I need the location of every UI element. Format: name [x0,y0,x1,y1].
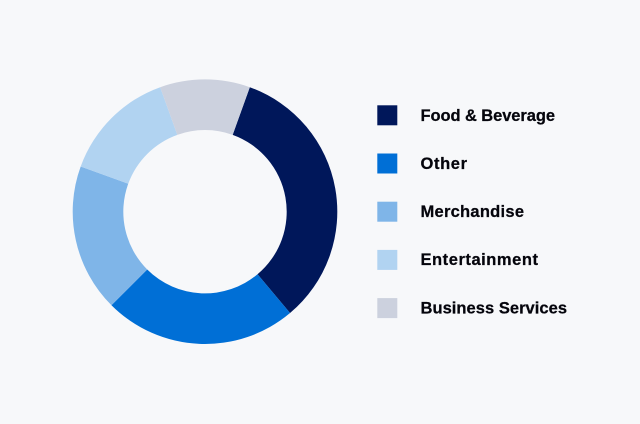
legend item: Business Services: Business Services [420,300,567,318]
legend item: Food & Beverage: Food & Beverage [420,107,555,125]
legend item: Other [377,154,468,174]
legend item: Entertainment: Entertainment [420,251,538,269]
segment: Food & Beverage [233,87,337,313]
segment: Merchandise [73,166,147,305]
legend item: Other: Other [420,155,468,173]
segment: Business Services [160,79,250,135]
segment: Other [111,269,290,344]
legend item: Merchandise [377,202,524,222]
legend item: Food & Beverage [377,105,555,125]
donut chart [73,79,337,344]
segment: Entertainment [81,87,177,184]
legend item: Entertainment [377,250,538,270]
legend item: Merchandise: Merchandise [420,203,524,221]
legend [377,105,567,318]
legend item: Business Services [377,298,567,318]
